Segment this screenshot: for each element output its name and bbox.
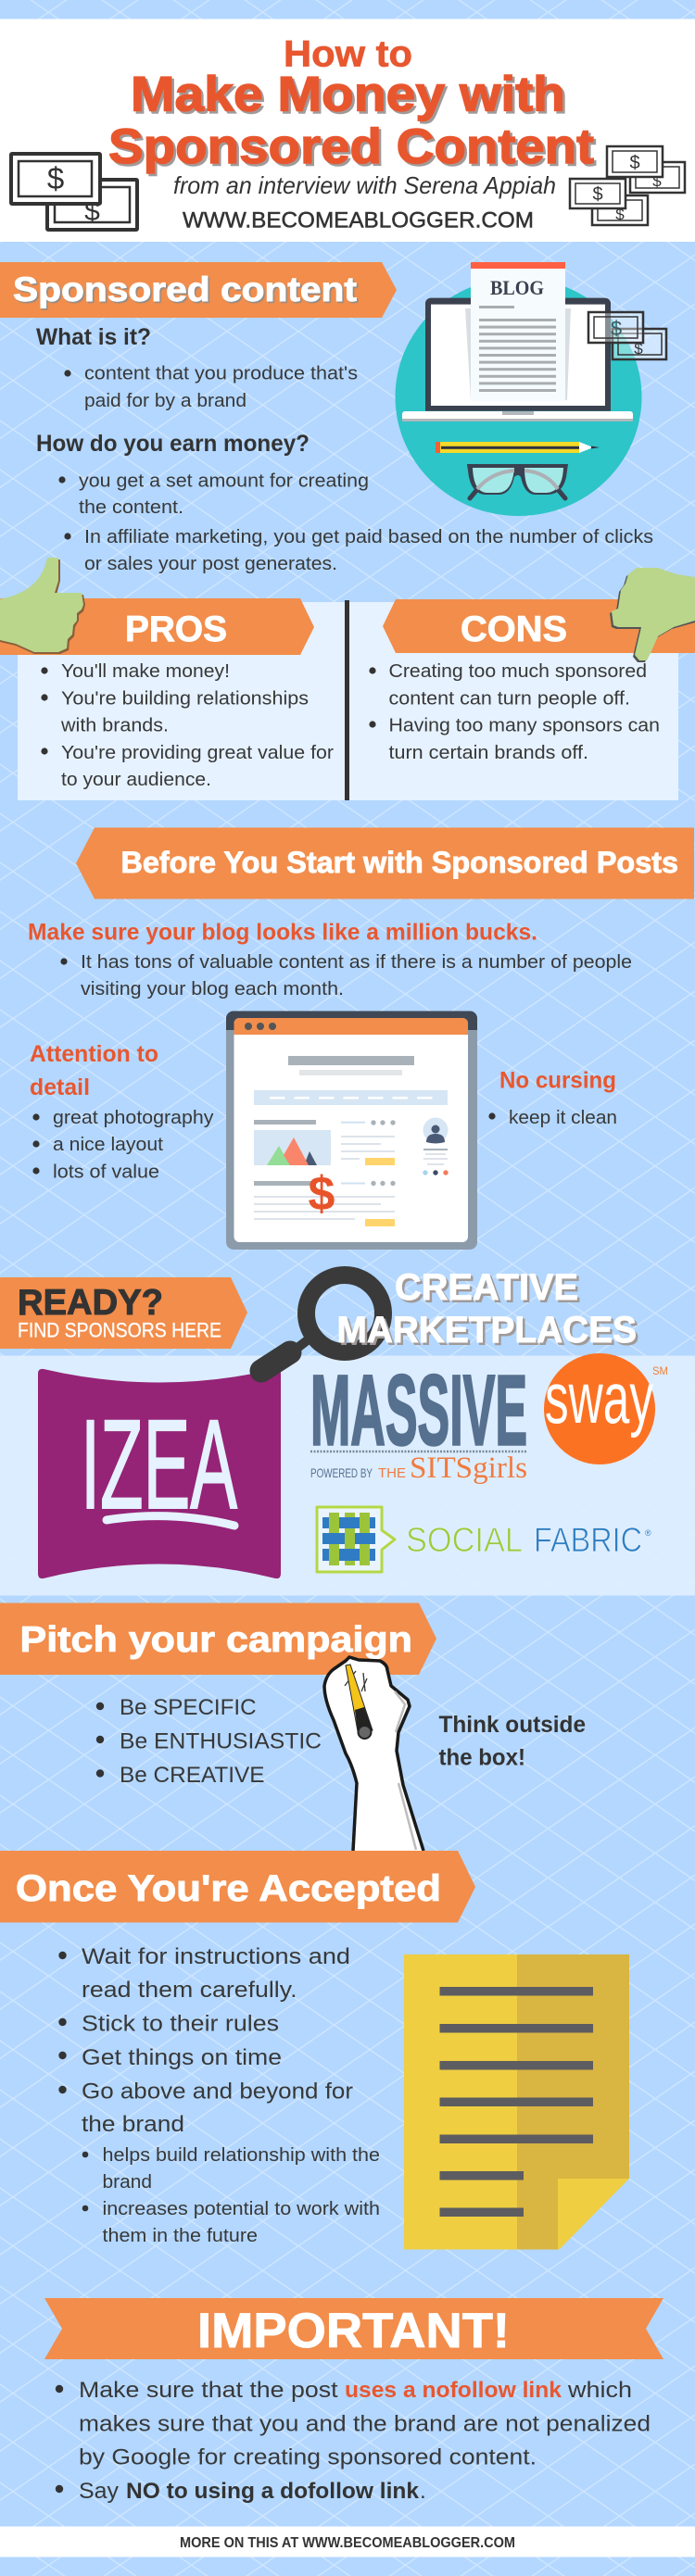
icon: dollar bills right: $ — [592, 184, 603, 205]
list: once accepted: read them carefully. — [82, 1978, 297, 2003]
icon: dollar bills left — [11, 154, 137, 230]
logo: social fabric: SOCIAL — [406, 1521, 523, 1559]
text block: million bucks: visiting your blog each month. — [81, 978, 344, 999]
list: important notes — [56, 2378, 651, 2504]
divider — [345, 600, 349, 800]
icon: dollar bills right: $ — [629, 153, 640, 173]
list: important notes: which — [567, 2378, 632, 2403]
banner: cons — [383, 599, 695, 653]
icon: thumbs up — [0, 558, 85, 654]
text block: how do you earn money: In affiliate marketing, you get paid based on the number of clicks — [84, 527, 653, 547]
text block: attention to detail: a nice layout — [53, 1134, 163, 1155]
illustration: hand with pencil — [324, 1657, 423, 1851]
text block: million bucks: Make sure your blog looks like a million bucks. — [28, 919, 537, 945]
logo: sway — [544, 1353, 668, 1464]
panel: marketplaces — [0, 1353, 695, 1595]
list: pros: You're providing great value for — [61, 742, 334, 763]
banner: pros: PROS — [125, 609, 227, 649]
text block: what is it — [36, 324, 358, 411]
list: pros — [41, 660, 334, 790]
list: pitch tips: Be CREATIVE — [120, 1763, 265, 1788]
callout: think outside the box: the box! — [439, 1745, 525, 1771]
icon: bills on laptop: $ — [611, 317, 622, 340]
callout: think outside the box — [439, 1712, 586, 1771]
list: once accepted: increases potential to work with — [102, 2199, 380, 2219]
text block: no cursing — [488, 1067, 617, 1128]
list: once accepted: them in the future — [102, 2226, 258, 2246]
list: cons — [369, 660, 660, 763]
callout: think outside the box: Think outside — [439, 1712, 586, 1738]
illustration: browser window — [226, 1011, 477, 1250]
icon: yellow document — [404, 1954, 629, 2249]
text block: how do you earn money: the content. — [79, 497, 183, 518]
list: pros: You're building relationships — [61, 687, 309, 710]
list: pros: to your audience. — [61, 769, 211, 790]
header panel — [0, 19, 695, 242]
website url: WWW.BECOMEABLOGGER.COM — [183, 207, 534, 233]
logo: social fabric: FABRIC — [534, 1521, 642, 1559]
icon: dollar bills right — [570, 146, 685, 225]
text block: how do you earn money: or sales your post generates. — [84, 554, 337, 574]
banner: ready find sponsors: FIND SPONSORS HERE — [18, 1319, 221, 1341]
logo: massive: THE — [378, 1465, 406, 1481]
text block: what is it: paid for by a brand — [84, 391, 246, 411]
icon: bills on laptop: $ — [634, 340, 643, 358]
logo: social fabric — [317, 1507, 651, 1572]
banner: sponsored content — [0, 262, 397, 318]
list: once accepted: brand — [102, 2172, 152, 2193]
subtitle: from an interview with Serena Appiah — [173, 171, 556, 199]
icon: magnifying glass — [261, 1275, 384, 1371]
list: cons: Having too many sponsors can — [389, 715, 660, 735]
banner: once you're accepted: Once You're Accepted — [16, 1868, 441, 1909]
title: make money with: Make Money with — [131, 67, 565, 122]
text block: attention to detail: Attention to — [30, 1041, 158, 1067]
icon: dollar sign: $ — [309, 1167, 335, 1221]
list: important notes: makes sure that you and the brand are not penalized — [79, 2412, 651, 2436]
list: pitch tips — [96, 1695, 322, 1788]
banner: before you start: Before You Start with Sponsored Posts — [120, 846, 678, 879]
banner: ready find sponsors — [0, 1277, 247, 1349]
text block: how do you earn money: you get a set amount for creating — [79, 471, 369, 491]
icon: dollar bills right: $ — [652, 172, 662, 190]
list: important notes: Make sure that the post — [79, 2378, 338, 2403]
list: cons: Creating too much sponsored — [389, 660, 647, 682]
text block: how do you earn money: How do you earn money? — [36, 431, 310, 457]
list: once accepted: Wait for instructions and — [82, 1944, 350, 1969]
list: important notes: . — [420, 2479, 426, 2504]
text block: no cursing: keep it clean — [509, 1107, 617, 1128]
list: important notes: NO to using a dofollow link — [126, 2479, 419, 2504]
text block: what is it: content that you produce that's — [84, 363, 358, 383]
banner: ready find sponsors: READY? — [18, 1283, 163, 1323]
footer strip: MORE ON THIS AT WWW.BECOMEABLOGGER.COM — [180, 2535, 515, 2551]
list: once accepted: the brand — [82, 2112, 184, 2137]
icon: dollar bills left: $ — [84, 196, 100, 227]
text block: attention to detail — [30, 1041, 214, 1182]
text block: attention to detail: lots of value — [53, 1162, 159, 1182]
banner: pitch your campaign: Pitch your campaign — [20, 1620, 412, 1660]
icon: bills on laptop — [588, 312, 666, 359]
logo: izea: IZEA — [81, 1394, 237, 1536]
list: important notes: by Google for creating sponsored content. — [79, 2445, 537, 2469]
list: pitch tips: Be ENTHUSIASTIC — [120, 1728, 322, 1754]
logo: massive — [310, 1354, 527, 1485]
text block: what is it: What is it? — [36, 324, 151, 350]
icon: glasses — [467, 464, 568, 498]
text block: how do you earn money — [36, 431, 653, 574]
text block: attention to detail: detail — [30, 1074, 90, 1100]
list: pros: with brands. — [60, 715, 169, 735]
icon: pencil — [436, 442, 600, 453]
text block: attention to detail: great photography — [53, 1107, 214, 1128]
list: pros: You'll make money! — [61, 660, 230, 682]
list: once accepted — [58, 1944, 380, 2246]
heading: creative marketplaces — [337, 1267, 637, 1351]
logo: massive: POWERED BY — [310, 1465, 373, 1480]
list: cons: content can turn people off. — [389, 687, 630, 710]
banner: before you start — [76, 828, 694, 898]
icon: user avatar — [423, 1117, 449, 1175]
logo: social fabric: ® — [645, 1528, 651, 1538]
banner: important — [44, 2298, 663, 2359]
list: once accepted: Go above and beyond for — [82, 2079, 353, 2105]
banner: sponsored content: Sponsored content — [13, 270, 357, 308]
list: once accepted: Stick to their rules — [82, 2012, 279, 2036]
heading: creative marketplaces: MARKETPLACES — [337, 1310, 637, 1351]
title: how to: How to — [284, 33, 412, 74]
list: pitch tips: Be SPECIFIC — [120, 1695, 256, 1720]
list: once accepted: Get things on time — [82, 2045, 282, 2070]
text block: no cursing: No cursing — [499, 1067, 616, 1093]
logo: sway: SM — [652, 1364, 668, 1377]
list: important notes: uses a nofollow link — [345, 2378, 562, 2403]
logo: izea — [38, 1369, 281, 1578]
list: important notes: Say — [79, 2479, 120, 2504]
banner: pitch your campaign — [0, 1602, 436, 1675]
text block: million bucks: It has tons of valuable content as if there is a number of people — [81, 951, 632, 973]
banner: once you're accepted — [0, 1851, 475, 1923]
banner: pros — [0, 598, 314, 655]
text block: million bucks — [28, 919, 632, 999]
banner: important: IMPORTANT! — [197, 2304, 510, 2358]
title: sponsored content: Sponsored Content — [108, 119, 594, 174]
icon: dollar bills right: $ — [615, 206, 625, 223]
illustration: blog laptop — [395, 262, 666, 516]
logo: massive: SITSgirls — [410, 1451, 527, 1485]
icon: dollar bills left: $ — [47, 161, 64, 195]
list: cons: turn certain brands off. — [389, 742, 588, 763]
list: once accepted: helps build relationship with the — [102, 2145, 380, 2166]
illustration: blog laptop: BLOG — [490, 276, 544, 299]
icon: thumbs down — [610, 568, 695, 662]
panel: pros and cons — [0, 558, 695, 800]
banner: cons: CONS — [461, 609, 567, 649]
footer strip — [0, 2527, 695, 2557]
heading: creative marketplaces: CREATIVE — [395, 1267, 578, 1308]
